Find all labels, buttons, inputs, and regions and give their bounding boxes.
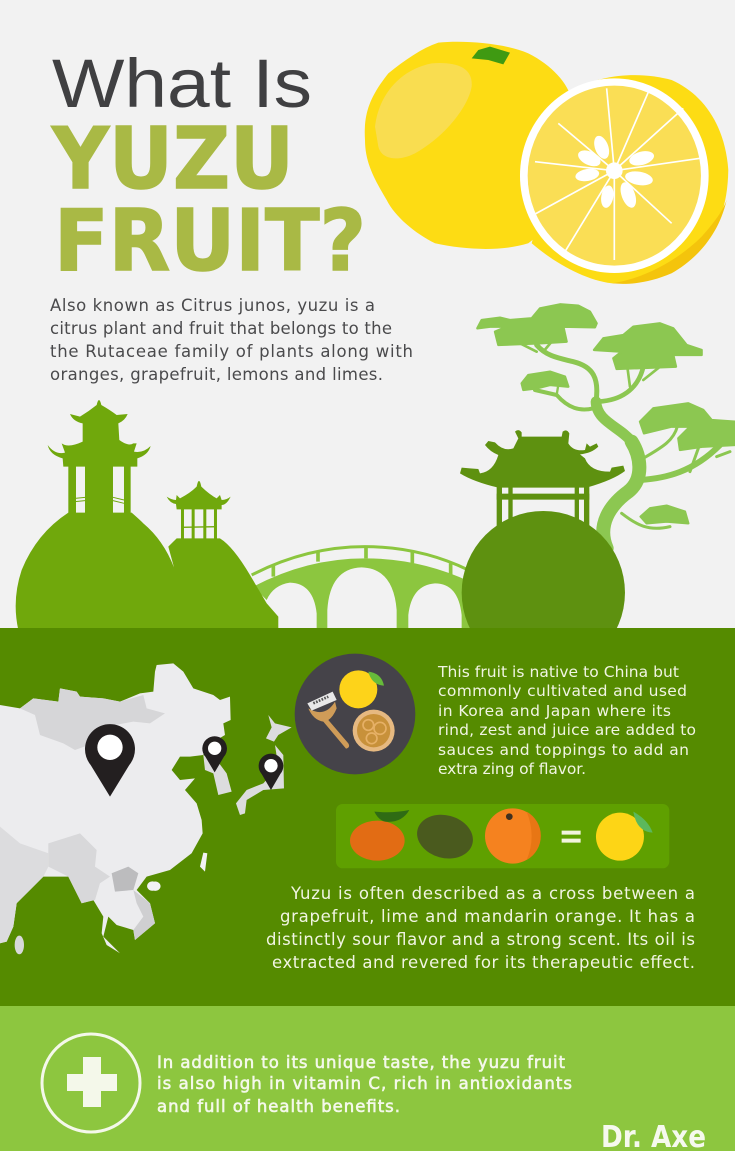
map: Mongolia	[20, 688, 165, 750]
icon: yuzu, peeler and bowl on dark circle	[295, 654, 415, 774]
panel: top background	[0, 0, 735, 629]
text: health benefits: and full of health benefits.	[157, 1097, 400, 1116]
map: Laos region	[112, 867, 138, 892]
map: Myanmar region	[48, 833, 110, 903]
pin: Korea	[202, 736, 227, 772]
text: health benefits: is also high in vitamin C, rich in antioxidants	[157, 1074, 572, 1093]
icon: health plus	[42, 1034, 140, 1132]
panel: dark green section	[0, 628, 735, 1007]
illustration: right pagoda on hill	[460, 430, 625, 674]
text: cross description: Yuzu is often described as a cross between a	[290, 884, 695, 903]
text: health benefits	[157, 1053, 572, 1116]
illustration: bonsai tree	[477, 304, 735, 548]
map: Korea	[203, 755, 232, 795]
text: cross description: extracted and revered for its therapeutic effect.	[272, 953, 695, 972]
map: Vietnam	[133, 890, 155, 940]
map of East Asia	[0, 663, 292, 954]
text: native to China	[437, 663, 696, 778]
text: native to China: rind, zest and juice are added to	[438, 721, 696, 739]
icon: mandarin	[350, 810, 409, 861]
map: islands	[147, 853, 207, 891]
pin: China	[85, 724, 135, 797]
icon: sliced yuzu half	[520, 75, 728, 284]
pin: Japan	[259, 754, 283, 790]
fruit equation bar	[336, 804, 669, 868]
illustration: left pagodas on hills	[16, 400, 278, 630]
title: FRUIT?	[54, 192, 366, 291]
icon: yuzu result	[596, 812, 653, 861]
text: health benefits: In addition to its unique taste, the yuzu fruit	[157, 1053, 566, 1072]
title: What Is	[52, 45, 312, 122]
map: China and Russian far east	[0, 663, 231, 953]
intro text: Also known as Citrus junos, yuzu is a	[50, 296, 375, 315]
text: native to China: This fruit is native to China but	[437, 663, 679, 681]
icon: lime	[412, 809, 478, 865]
icon: orange	[485, 808, 541, 864]
text: cross description: distinctly sour flavor and a strong scent. Its oil is	[266, 930, 695, 949]
illustration: bridge	[252, 547, 470, 630]
text: native to China: sauces and toppings to add an	[438, 741, 689, 759]
text: native to China: commonly cultivated and used	[438, 682, 687, 700]
intro text: the Rutaceae family of plants along with	[50, 342, 413, 361]
text: native to China: in Korea and Japan where its	[438, 702, 671, 720]
panel: light green footer	[0, 1006, 735, 1151]
text: cross description	[266, 884, 695, 972]
map: Sri Lanka	[15, 936, 24, 954]
intro text: oranges, grapefruit, lemons and limes.	[50, 365, 383, 384]
intro text: citrus plant and fruit that belongs to the	[50, 319, 392, 338]
icon: whole yuzu fruit	[365, 42, 588, 249]
text: native to China: extra zing of flavor.	[438, 760, 586, 778]
title: YUZU	[51, 110, 294, 209]
equals sign	[562, 831, 581, 843]
map: Japan	[236, 715, 292, 815]
title	[51, 45, 366, 291]
text: cross description: grapefruit, lime and mandarin orange. It has a	[280, 907, 695, 926]
intro text	[50, 296, 413, 384]
map: India	[0, 827, 48, 943]
